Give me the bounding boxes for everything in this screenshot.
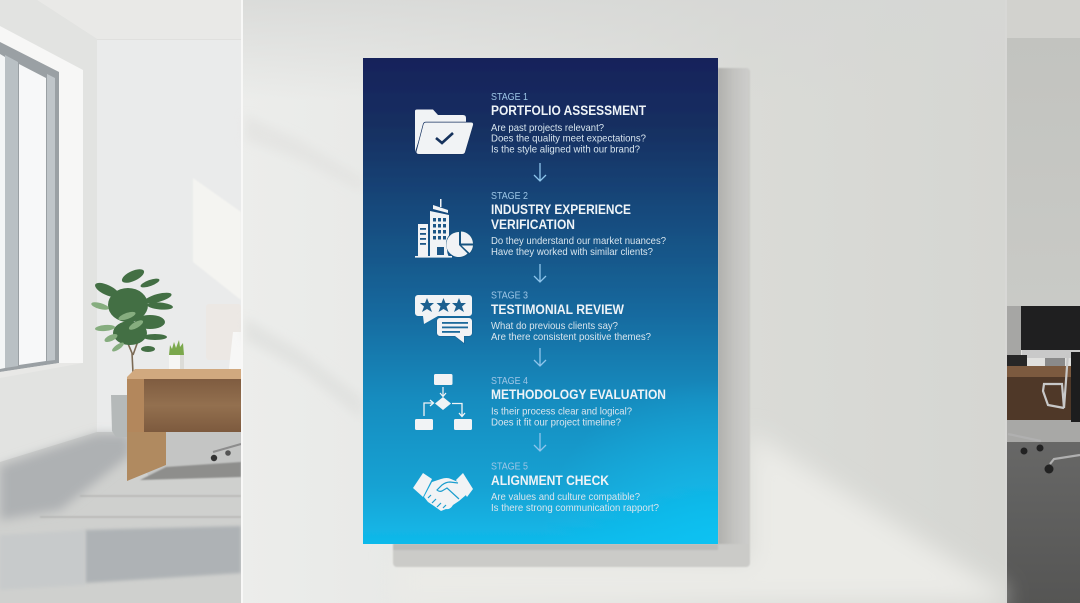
stage 3 text: What do previous clients say?	[491, 321, 618, 332]
stage 4 text: Is their process clear and logical?	[491, 406, 632, 418]
stage 5 text	[491, 460, 659, 514]
right office room background	[1007, 0, 1080, 603]
plant and pot	[91, 266, 173, 437]
stage 2 text: Do they understand our market nuances?	[491, 236, 666, 247]
left office room background	[0, 0, 241, 603]
stage 5 text: ALIGNMENT CHECK	[491, 473, 609, 488]
desk with small plant and monitor	[127, 304, 241, 481]
arrow 1	[534, 163, 546, 181]
stage 1 text: PORTFOLIO ASSESSMENT	[491, 103, 647, 118]
central white wall	[241, 0, 1007, 603]
stage 5 text: Are values and culture compatible?	[491, 492, 640, 503]
stage 2 text: VERIFICATION	[491, 217, 575, 232]
stage 1 text: Does the quality meet expectations?	[491, 134, 646, 144]
stage 1 text: Are past projects relevant?	[491, 123, 604, 134]
arrow 4	[534, 433, 546, 451]
arrow 2	[534, 264, 546, 282]
poster panel	[363, 58, 718, 544]
stage 2 text	[491, 190, 666, 258]
stage 3: testimonial review	[415, 290, 651, 343]
stage 4 text: Does it fit our project timeline?	[491, 418, 621, 428]
stage 3 text	[491, 290, 651, 343]
stage 5: alignment check	[413, 460, 659, 514]
stage 1 text: STAGE 1	[491, 91, 528, 103]
stage 5 text: STAGE 5	[491, 460, 528, 472]
stage 3 text: STAGE 3	[491, 290, 528, 302]
stage 3 text: Are there consistent positive themes?	[491, 332, 651, 343]
stage 4: methodology evaluation	[415, 374, 666, 430]
icon: speech bubbles with stars	[415, 295, 472, 343]
stage 3 text: TESTIMONIAL REVIEW	[491, 302, 624, 317]
stage 1: portfolio assessment	[415, 91, 647, 156]
stage 2: industry experience verification	[415, 190, 666, 258]
stage 2 text: Have they worked with similar clients?	[491, 247, 653, 258]
icon: handshake	[413, 473, 473, 511]
icon: folder with checkmark	[415, 110, 473, 154]
icon: process flowchart	[415, 374, 472, 430]
icon: buildings with pie chart	[415, 199, 474, 258]
stage 2 text: STAGE 2	[491, 190, 528, 202]
arrow 3	[534, 348, 546, 366]
stage 2 text: INDUSTRY EXPERIENCE	[491, 202, 631, 217]
stage 1 text	[491, 91, 647, 156]
stage 1 text: Is the style aligned with our brand?	[491, 144, 640, 156]
stage 4 text: STAGE 4	[491, 375, 528, 387]
poster shadow	[393, 68, 750, 567]
stage 4 text: METHODOLOGY EVALUATION	[491, 387, 666, 402]
window	[0, 26, 83, 378]
stage 4 text	[491, 375, 666, 428]
stage 5 text: Is there strong communication rapport?	[491, 503, 659, 514]
